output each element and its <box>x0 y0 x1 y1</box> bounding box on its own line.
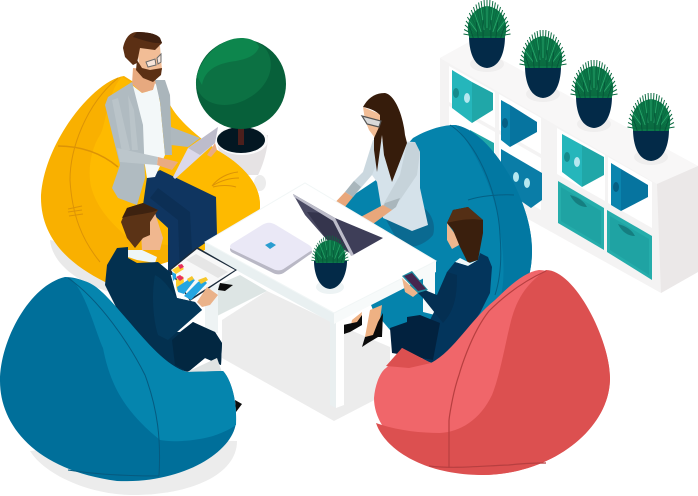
hands <box>328 192 392 232</box>
beard <box>136 60 162 82</box>
heels and legs <box>350 305 382 337</box>
white closed laptop <box>230 223 312 274</box>
neck <box>132 68 156 93</box>
red bean bag <box>374 270 610 475</box>
plant pots on shelf <box>463 0 675 165</box>
pot <box>216 135 268 175</box>
collar <box>455 258 478 266</box>
teal folders <box>452 70 493 123</box>
plant 3 <box>570 60 618 132</box>
right leg <box>423 264 435 315</box>
left leg <box>205 285 218 333</box>
collar <box>128 250 157 263</box>
trousers <box>390 315 440 360</box>
hand <box>157 157 178 170</box>
teal drawer right <box>607 210 652 280</box>
seated woman with phone <box>390 207 492 363</box>
left edge <box>205 242 334 324</box>
lap <box>385 205 434 247</box>
glasses <box>362 116 381 127</box>
sleeve <box>417 272 457 323</box>
shelving unit <box>440 42 698 293</box>
sock <box>187 358 223 375</box>
jacket <box>105 82 145 205</box>
phone <box>402 271 428 293</box>
foliage <box>196 39 286 129</box>
right edge <box>334 261 436 324</box>
shelf side <box>657 166 698 293</box>
blue folder right <box>611 163 648 211</box>
hidden teal folder <box>470 130 494 160</box>
glasses <box>146 54 161 67</box>
teal drawer left <box>558 181 604 250</box>
white table <box>205 183 436 408</box>
shelf top <box>440 42 698 184</box>
blouse <box>372 140 428 231</box>
near shoe <box>235 400 242 412</box>
yellow chair shadow <box>50 240 140 292</box>
open laptop <box>293 194 383 256</box>
blue binder row <box>501 149 542 208</box>
hand <box>197 287 218 307</box>
tablet <box>173 127 218 179</box>
arm <box>153 275 202 340</box>
teal folders right <box>562 134 604 187</box>
trousers <box>143 170 217 275</box>
tree in pot <box>196 38 286 191</box>
top <box>205 183 436 313</box>
hair <box>363 93 407 182</box>
t-shirt <box>132 83 165 178</box>
far shoe <box>218 283 233 291</box>
jacket <box>105 247 222 372</box>
seated woman with laptop <box>328 93 434 347</box>
plant 4 <box>627 93 675 165</box>
clipboard <box>169 247 237 301</box>
floor shadow under table <box>222 291 390 421</box>
plant 2 <box>519 30 567 102</box>
trousers <box>172 322 222 372</box>
face <box>363 107 382 138</box>
front blue bean bag shadow <box>30 440 237 495</box>
blue folder <box>501 100 537 147</box>
face <box>447 223 459 249</box>
plant 1 <box>463 0 511 72</box>
under-table shadow <box>217 275 267 316</box>
hair <box>121 203 158 248</box>
seated man with clipboard <box>105 203 242 412</box>
table plant <box>311 236 349 294</box>
head <box>140 213 163 250</box>
hand <box>402 278 418 297</box>
front leg <box>330 318 344 408</box>
yellow bean bag <box>41 76 260 282</box>
bars <box>172 264 208 300</box>
front blue bean bag <box>0 277 236 481</box>
hair <box>123 32 162 65</box>
back blue bean bag <box>340 125 532 345</box>
head <box>137 46 162 72</box>
hair <box>447 207 483 263</box>
seated man with tablet <box>105 32 218 275</box>
jacket <box>422 253 492 363</box>
